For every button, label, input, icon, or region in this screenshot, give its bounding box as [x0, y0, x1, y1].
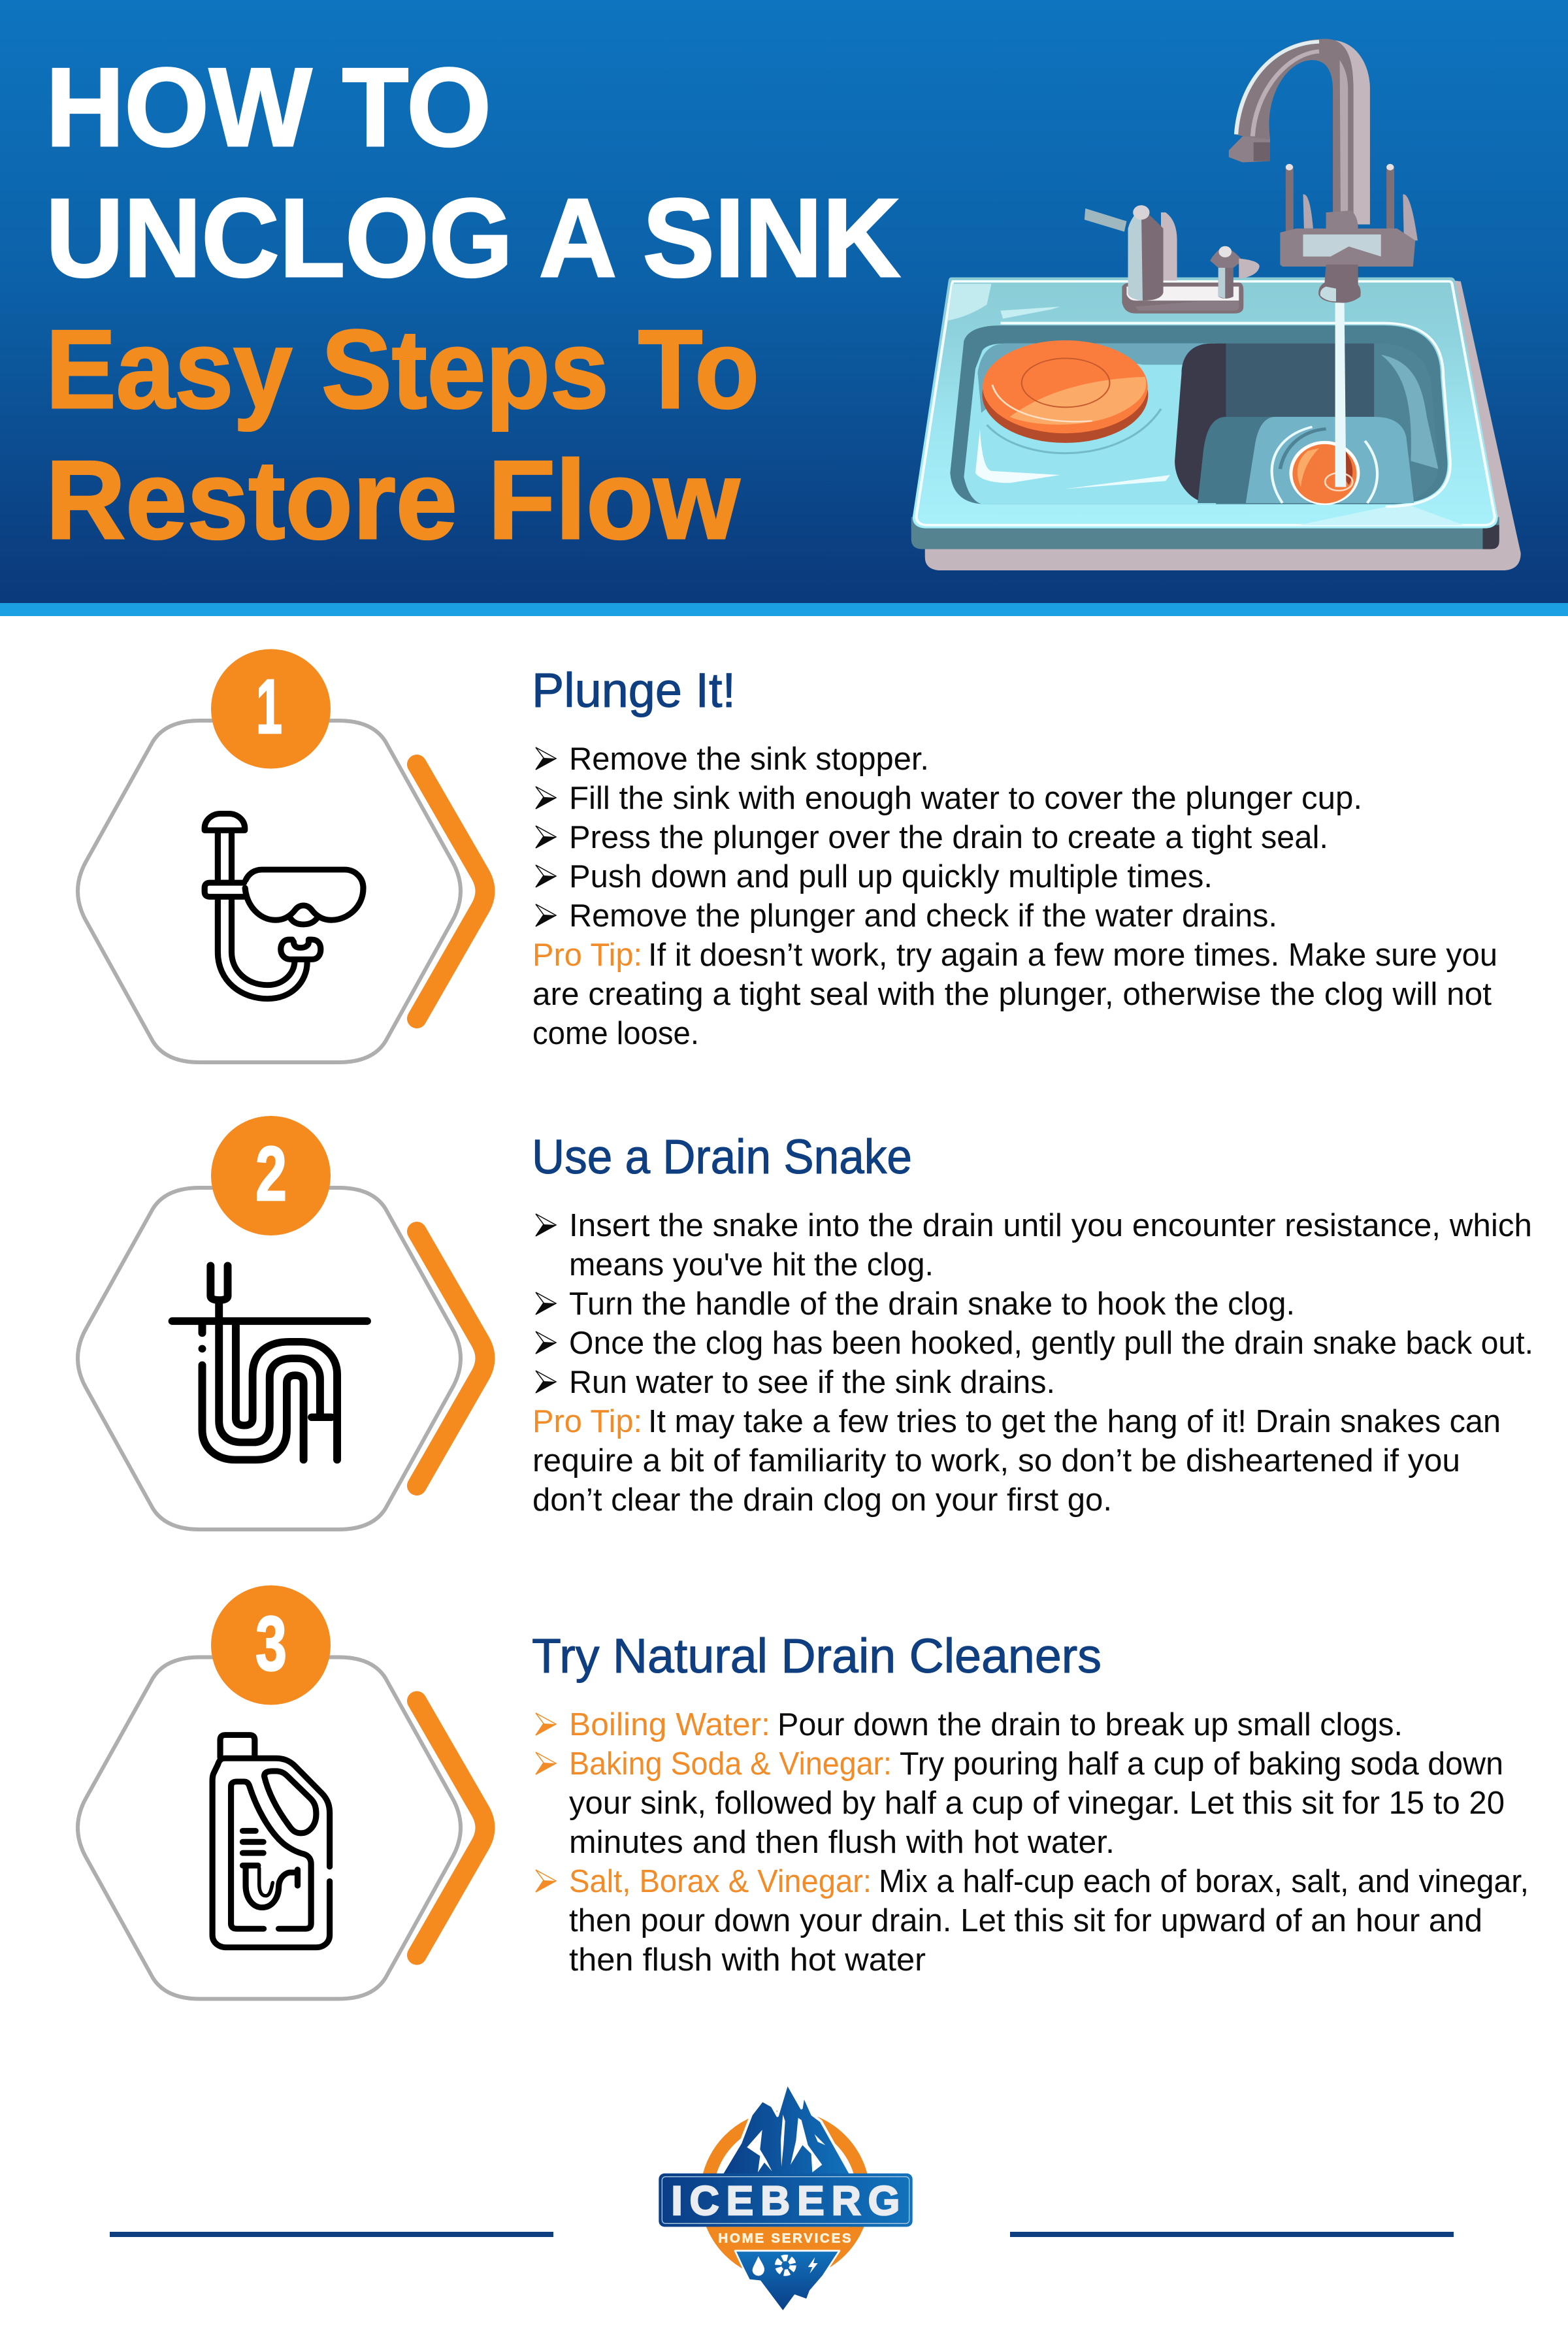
- step 1 bullet list: Remove the plunger and check if the water drains.: [569, 898, 1277, 934]
- hexagon 2: [78, 1188, 461, 1529]
- step 1 bullet list: Remove the sink stopper.: [569, 742, 929, 777]
- illustration: sink with faucet: [911, 39, 1521, 570]
- step 3 bullet list: then flush with hot water: [569, 1942, 926, 1978]
- heading: Plunge It: Plunge It!: [532, 663, 736, 717]
- logo banner: ICEBERG: [671, 2178, 900, 2224]
- step 2 panel: [78, 1116, 1533, 1529]
- water stream: [1335, 302, 1346, 487]
- chevron 1: [417, 764, 485, 1019]
- heading: Use a Drain Snake: Use a Drain Snake: [532, 1130, 912, 1184]
- number badge 2: 2: [255, 1131, 287, 1217]
- left handle and base: [1085, 205, 1260, 314]
- iceberg top: [721, 2083, 851, 2176]
- footer rule right: [1010, 2232, 1454, 2237]
- iceberg base: [735, 2251, 840, 2311]
- step 3 bullet list: Salt, Borax & Vinegar:: [569, 1864, 872, 1899]
- step 2 bullet list: means you've hit the clog.: [569, 1247, 934, 1282]
- step 1 bullet list: Fill the sink with enough water to cover the plunger cup.: [569, 781, 1362, 816]
- hexagon 1: [78, 721, 461, 1062]
- step 3 panel: [78, 1585, 1529, 1999]
- hexagon 3: [78, 1657, 461, 1999]
- header background: [0, 0, 1568, 603]
- footer rule left: [110, 2232, 553, 2237]
- step 2 bullet list: Turn the handle of the drain snake to hook the clog.: [569, 1286, 1295, 1322]
- step 3 bullet list: then pour down your drain. Let this sit for upward of an hour and: [569, 1903, 1482, 1938]
- logo tagline: HOME SERVICES: [718, 2231, 851, 2246]
- header accent band: [0, 603, 1568, 616]
- number badge 2: [211, 1116, 331, 1235]
- step 1 pro tip: Pro Tip:: [532, 938, 642, 973]
- step 1 pro tip: If it doesn’t work, try again a few more times. Make sure you: [648, 938, 1497, 973]
- left basin floor: [964, 344, 1216, 504]
- icon: snorkel: [204, 813, 363, 999]
- chevron 3: [417, 1701, 485, 1955]
- step 2 bullet list: Run water to see if the sink drains.: [569, 1365, 1055, 1400]
- icon: drain snake and pipes: [172, 1266, 367, 1460]
- logo: Iceberg Home Services: [659, 2083, 913, 2311]
- sink top: [913, 278, 1498, 529]
- faucet: [1229, 39, 1418, 302]
- step 2 pro tip: don’t clear the drain clog on your first go.: [532, 1482, 1112, 1518]
- step 3 bullet list: minutes and then flush with hot water.: [569, 1825, 1115, 1860]
- title: HOW TO: [46, 45, 491, 170]
- step 1 panel: [78, 649, 1497, 1062]
- number badge 3: 3: [255, 1601, 287, 1687]
- logo ring: [707, 2117, 864, 2274]
- title: Restore Flow: [46, 438, 740, 563]
- step 3 bullet list: Baking Soda & Vinegar:: [569, 1746, 892, 1782]
- sink shadow: [925, 280, 1521, 570]
- step 3 bullet list: Boiling Water:: [569, 1707, 770, 1742]
- number badge 1: 1: [256, 664, 282, 750]
- step 1 bullet list: Push down and pull up quickly multiple times.: [569, 859, 1213, 894]
- step 2 bullet list: Insert the snake into the drain until you encounter resistance, which: [569, 1208, 1532, 1243]
- step 1 bullet list: Press the plunger over the drain to create a tight seal.: [569, 820, 1328, 855]
- chevron 2: [417, 1232, 485, 1486]
- drain: [1272, 427, 1377, 505]
- plate: [982, 340, 1148, 443]
- step 3 bullet list: [536, 1707, 1529, 1978]
- title: [46, 45, 900, 563]
- step 3 bullet list: Pour down the drain to break up small clogs.: [777, 1707, 1403, 1742]
- step 3 bullet list: Mix a half-cup each of borax, salt, and vinegar,: [879, 1864, 1529, 1899]
- icon: drain cleaner bottle: [212, 1735, 330, 1948]
- step 2 pro tip: Pro Tip:: [532, 1404, 642, 1439]
- step 2 bullet list: Once the clog has been hooked, gently pull the drain snake back out.: [569, 1326, 1533, 1361]
- step 3 bullet list: your sink, followed by half a cup of vinegar. Let this sit for 15 to 20: [569, 1786, 1505, 1821]
- number badge 1: [211, 649, 331, 768]
- sink side: [911, 517, 1499, 549]
- step 1 pro tip: are creating a tight seal with the plunger, otherwise the clog will not: [532, 977, 1492, 1012]
- basin outer: [950, 325, 1448, 504]
- step 2 pro tip: require a bit of familiarity to work, so don’t be disheartened if you: [532, 1443, 1460, 1478]
- heading: Try Natural Drain Cleaners: Try Natural Drain Cleaners: [532, 1629, 1102, 1683]
- step 1 pro tip: come loose.: [532, 1016, 699, 1051]
- step 2 pro tip: [532, 1404, 1501, 1518]
- title: UNCLOG A SINK: [46, 176, 900, 301]
- step 3 bullet list: Try pouring half a cup of baking soda down: [900, 1746, 1503, 1782]
- step 1 pro tip: [532, 938, 1497, 1051]
- title: Easy Steps To: [46, 307, 759, 432]
- step 1 bullet list: [536, 742, 1362, 934]
- step 2 pro tip: It may take a few tries to get the hang of it! Drain snakes can: [648, 1404, 1501, 1439]
- number badge 3: [211, 1585, 331, 1705]
- right basin: [1175, 344, 1226, 501]
- step 2 bullet list: [536, 1208, 1533, 1400]
